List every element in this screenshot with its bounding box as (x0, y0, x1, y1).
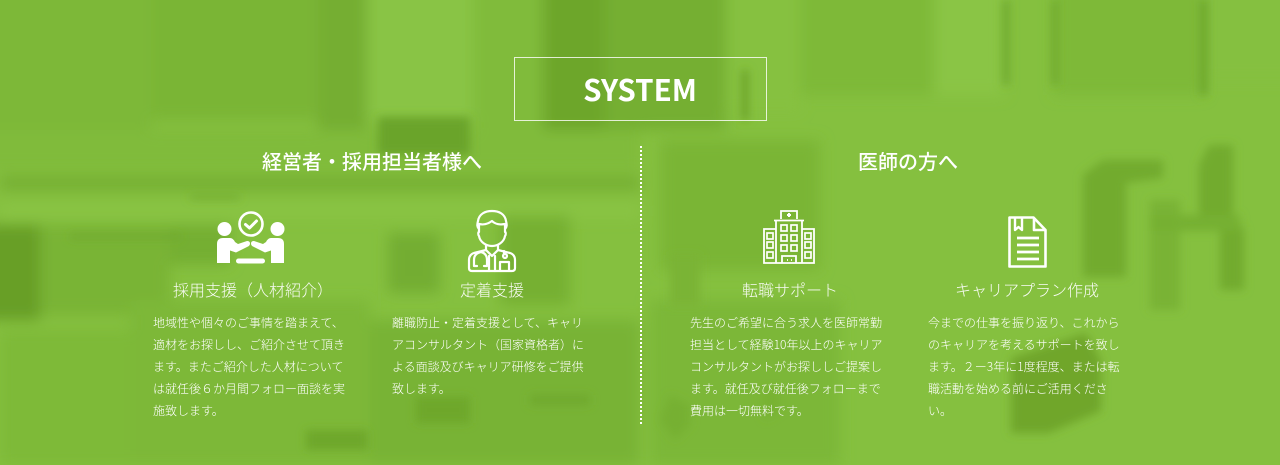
heading: employers: 経営者・採用担当者様へ (262, 146, 482, 175)
icon: document (1008, 216, 1047, 268)
panel: doctors (690, 146, 1120, 419)
title box (514, 57, 767, 121)
panel: employers (153, 146, 584, 419)
text: job change support: 費用は一切無料です。 (690, 402, 809, 419)
label: job change support: 転職サポート (742, 277, 838, 301)
text: retention: アコンサルタント（国家資格者）に (392, 336, 584, 353)
text: recruitment: 地域性や個々のご事情を踏まえて、 (153, 314, 344, 331)
heading: doctors: 医師の方へ (858, 146, 958, 175)
text: recruitment: 適材をお探しし、ご紹介させて頂き (153, 336, 345, 353)
text: career plan: い。 (928, 402, 952, 419)
text: career plan: 職活動を始める前にご活用くださ (928, 380, 1108, 397)
icon: hospital (763, 210, 815, 264)
text: retention: 離職防止・定着支援として、キャリ (392, 314, 583, 331)
text: recruitment: 施致します。 (153, 402, 224, 419)
icon: handshake with check (217, 211, 284, 264)
text: recruitment (153, 314, 345, 419)
label: retention: 定着支援 (460, 277, 524, 301)
text: job change support (690, 314, 882, 419)
text: retention: よる面談及びキャリア研修をご提供 (392, 358, 584, 375)
text: job change support: 先生のご希望に合う求人を医師常勤 (690, 314, 882, 331)
text: career plan: のキャリアを考えるサポートを致し (928, 336, 1120, 353)
text: recruitment: は就任後６か月間フォロー面談を実 (153, 380, 345, 397)
label: recruitment: 採用支援（人材紹介） (173, 277, 333, 301)
title text: SYSTEM (583, 68, 697, 110)
vertical dotted divider (640, 146, 642, 424)
text: career plan (928, 314, 1120, 419)
text: job change support: コンサルタントがお探ししご提案し (690, 358, 882, 375)
text: recruitment: ます。またご紹介した人材について (153, 358, 343, 375)
icon: doctor (468, 210, 516, 272)
text: job change support: 担当として経験10年以上のキャリア (690, 336, 882, 353)
text: career plan: ます。２ー3年に1度程度、または転 (928, 358, 1120, 375)
text: retention (392, 314, 584, 397)
text: career plan: 今までの仕事を振り返り、これから (928, 314, 1120, 331)
text: job change support: ます。就任及び就任後フォローまで (690, 380, 881, 397)
text: retention: 致します。 (392, 380, 451, 397)
label: career plan: キャリアプラン作成 (955, 277, 1099, 301)
